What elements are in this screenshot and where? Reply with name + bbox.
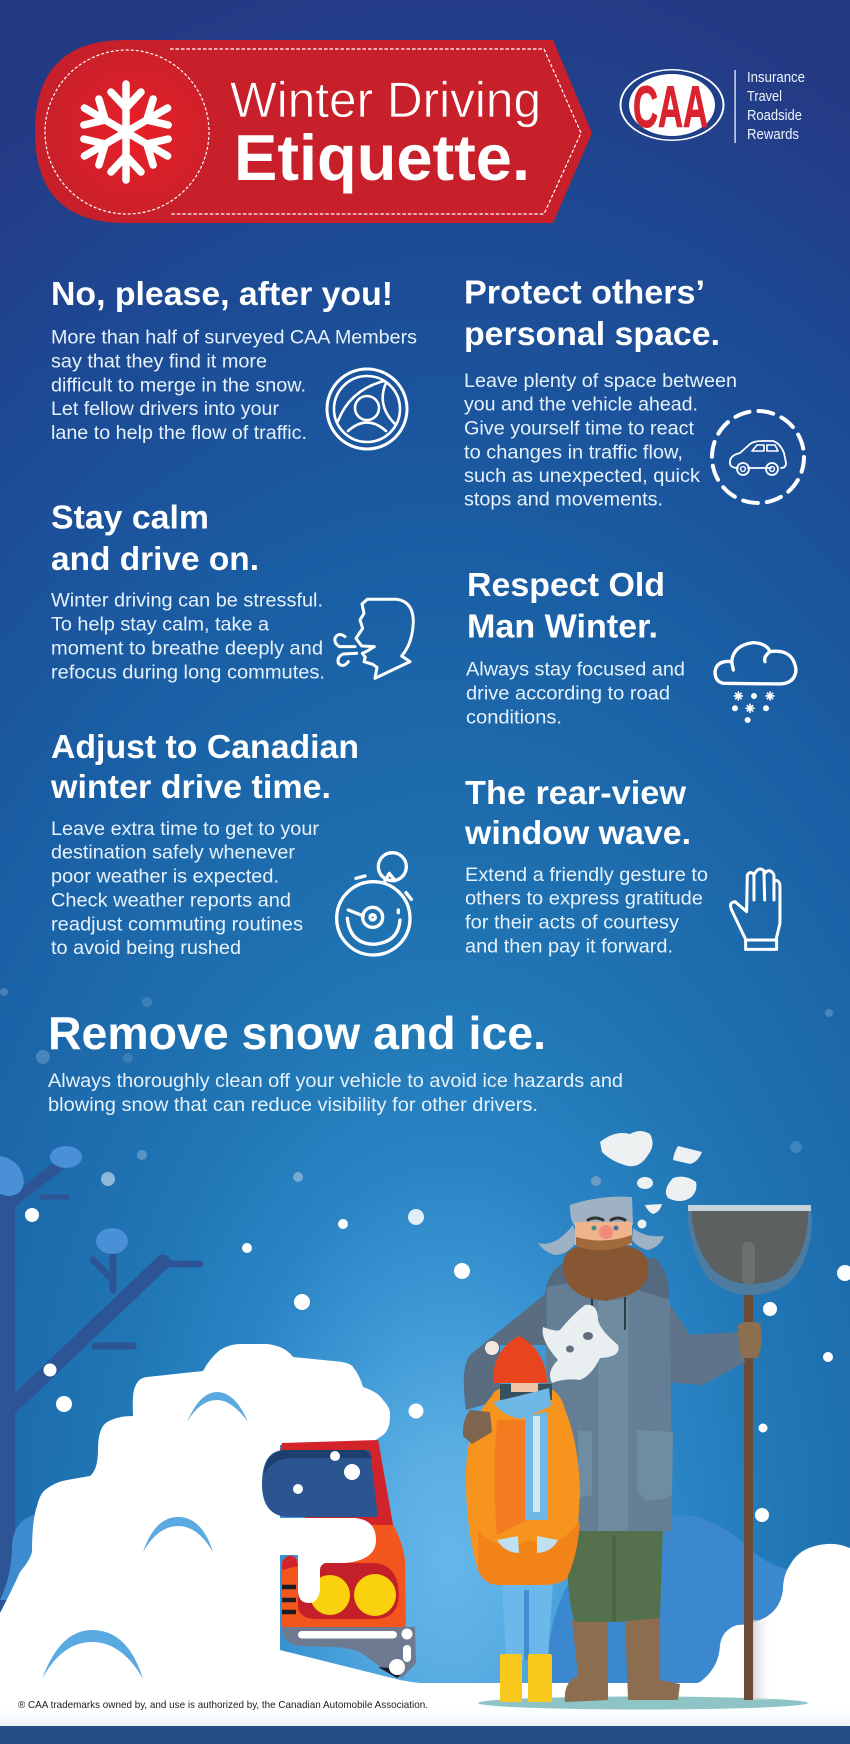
CAA logo: Roadside: [747, 108, 802, 124]
panel: Stay calm and drive on: [51, 500, 413, 683]
text block: space advice: Leave plenty of space between: [464, 370, 737, 392]
text block: drive time advice: destination safely whenever: [51, 842, 296, 864]
title text: [230, 72, 541, 194]
trousers: [567, 1525, 663, 1622]
mittens: [497, 1536, 558, 1553]
legs: [502, 1580, 553, 1660]
illustration: ground shadow: [478, 1696, 808, 1710]
stripes: [282, 1587, 296, 1612]
panel: Respect Old Man Winter: Man Winter.: [467, 608, 658, 645]
illustration: bare tree: [0, 1146, 200, 1610]
snow dots on window: [293, 1451, 360, 1494]
text block: clean vehicle advice: Always thoroughly clean off your vehicle to avoid ice hazards and: [48, 1070, 623, 1092]
title ribbon: [35, 40, 592, 223]
illustration: snow ground: [0, 1683, 850, 1726]
panel: The rear-view window wave: The rear-view: [465, 775, 687, 812]
beard: [563, 1235, 648, 1301]
icon: waving gloved hand: [731, 869, 780, 949]
text block: space advice: stops and movements.: [464, 489, 663, 511]
hat flaps and hat: [538, 1197, 664, 1255]
red hat: [485, 1336, 547, 1383]
panel: Protect others' personal space: personal space.: [464, 316, 720, 353]
title text: Etiquette.: [234, 121, 530, 194]
tail lamps: [298, 1563, 399, 1619]
text block: drive time advice: poor weather is expected.: [51, 866, 279, 888]
illustration: ground tint: [0, 1700, 850, 1726]
coat: [466, 1387, 580, 1585]
panel: The rear-view window wave: window wave.: [464, 815, 691, 852]
text block: stay calm advice: Winter driving can be stressful.: [51, 590, 323, 612]
text block: drive time advice: Check weather reports and: [51, 889, 291, 911]
illustration: blue drift behind the figures: [545, 1515, 790, 1684]
text block: clean vehicle advice: [48, 1070, 623, 1116]
scarf: [493, 1388, 551, 1520]
panel: Respect Old Man Winter: [466, 567, 796, 728]
panel: Adjust to Canadian winter drive time: [50, 729, 411, 959]
text block: stay calm advice: refocus during long commutes.: [51, 661, 325, 683]
icon: snow cloud: [715, 643, 796, 721]
panel: No, please, after you: No, please, after you!: [51, 276, 393, 313]
CAA logo: [620, 69, 805, 143]
CAA logo: Insurance: [747, 70, 805, 86]
text block: gesture advice: [465, 864, 708, 957]
snowfall dots: [0, 988, 850, 1522]
icon: head breathing out: [335, 599, 413, 678]
text block: stay calm advice: [51, 590, 325, 683]
panel: Remove snow and ice: Remove snow and ice.: [48, 1007, 546, 1059]
text block: merge advice: lane to help the flow of traffic.: [51, 422, 307, 444]
text block: gesture advice: others to express gratitude: [465, 888, 703, 910]
text block: road conditions advice: Always stay focused and: [466, 658, 685, 680]
panel: Adjust to Canadian winter drive time: Adjust to Canadian: [51, 729, 359, 766]
panel: No, please, after you: [51, 276, 417, 449]
text block: gesture advice: and then pay it forward.: [465, 935, 673, 957]
dripping snow: [250, 1518, 376, 1603]
icon: car inside dashed circle: [712, 411, 804, 503]
illustration: snow chunks thrown from shovel: [591, 1131, 702, 1228]
text block: gesture advice: for their acts of courtesy: [465, 912, 679, 934]
text block: space advice: Give yourself time to react: [464, 418, 695, 440]
text block: merge advice: say that they find it more: [51, 350, 267, 372]
illustration: pole shadow on snow: [753, 1620, 773, 1700]
text block: merge advice: difficult to merge in the snow.: [51, 374, 306, 396]
text block: merge advice: Let fellow drivers into your: [51, 398, 279, 420]
text block: merge advice: More than half of surveyed CAA Members: [51, 327, 417, 349]
text block: space advice: [464, 370, 737, 511]
shovel: [688, 1205, 812, 1700]
icon: snowflake: [77, 84, 175, 180]
panel: Stay calm and drive on: Stay calm: [51, 500, 209, 537]
CAA logo: Travel: [747, 89, 782, 105]
snow crescents: [42, 1392, 248, 1679]
illustration: snow-buried car: [0, 1344, 440, 1726]
yellow boots: [500, 1654, 552, 1702]
text block: road conditions advice: conditions.: [466, 706, 562, 728]
panel: Adjust to Canadian winter drive time: winter drive time.: [50, 769, 331, 806]
face and hair: [500, 1380, 552, 1400]
text block: stay calm advice: To help stay calm, take a: [51, 614, 269, 636]
face: [575, 1218, 632, 1245]
text block: clean vehicle advice: blowing snow that can reduce visibility for other drivers.: [48, 1094, 538, 1116]
illustration: right snow drift: [680, 1544, 850, 1700]
snow mound: [0, 1344, 440, 1726]
text block: space advice: such as unexpected, quick: [464, 465, 700, 487]
man's glove on shoulder: [463, 1410, 492, 1444]
car body: [270, 1440, 393, 1525]
text block: space advice: to changes in traffic flow,: [464, 441, 683, 463]
panel: Stay calm and drive on: and drive on.: [51, 541, 259, 578]
text block: road conditions advice: [466, 658, 685, 728]
bumper: [282, 1627, 416, 1678]
right arm and glove: [662, 1298, 762, 1385]
panel: Remove snow and ice: [48, 1007, 623, 1116]
boots: [565, 1615, 680, 1702]
title text: Winter Driving: [230, 72, 541, 128]
panel: The rear-view window wave: [464, 775, 780, 957]
text block: gesture advice: Extend a friendly gesture to: [465, 864, 708, 886]
text block: drive time advice: Leave extra time to get to your: [51, 818, 320, 840]
panel: Respect Old Man Winter: Respect Old: [467, 567, 665, 604]
coat: [545, 1258, 673, 1531]
illustration: child in orange coat: [463, 1336, 580, 1702]
footer trademark text: ® CAA trademarks owned by, and use is authorized by, the Canadian Automobile Association.: [18, 1699, 428, 1711]
CAA logo: CAA: [633, 75, 708, 140]
panel: Protect others' personal space: Protect others’: [464, 275, 705, 312]
text block: stay calm advice: moment to breathe deeply and: [51, 637, 323, 659]
panel: Protect others' personal space: [464, 275, 804, 511]
icon: steering wheel with driver: [327, 369, 407, 449]
footer band: [0, 1726, 850, 1744]
text block: space advice: you and the vehicle ahead.: [464, 394, 698, 416]
text block: road conditions advice: drive according to road: [466, 682, 670, 704]
text block: drive time advice: readjust commuting routines: [51, 913, 303, 935]
snow on chest: [543, 1305, 619, 1383]
text block: drive time advice: [51, 818, 320, 959]
text block: merge advice: [51, 327, 417, 444]
rear window: [262, 1450, 378, 1517]
text block: drive time advice: to avoid being rushed: [51, 937, 241, 959]
left arm: [464, 1282, 560, 1410]
icon: stopwatch: [337, 853, 411, 955]
CAA logo: Rewards: [747, 127, 799, 143]
illustration: man holding shovel: [464, 1197, 812, 1702]
